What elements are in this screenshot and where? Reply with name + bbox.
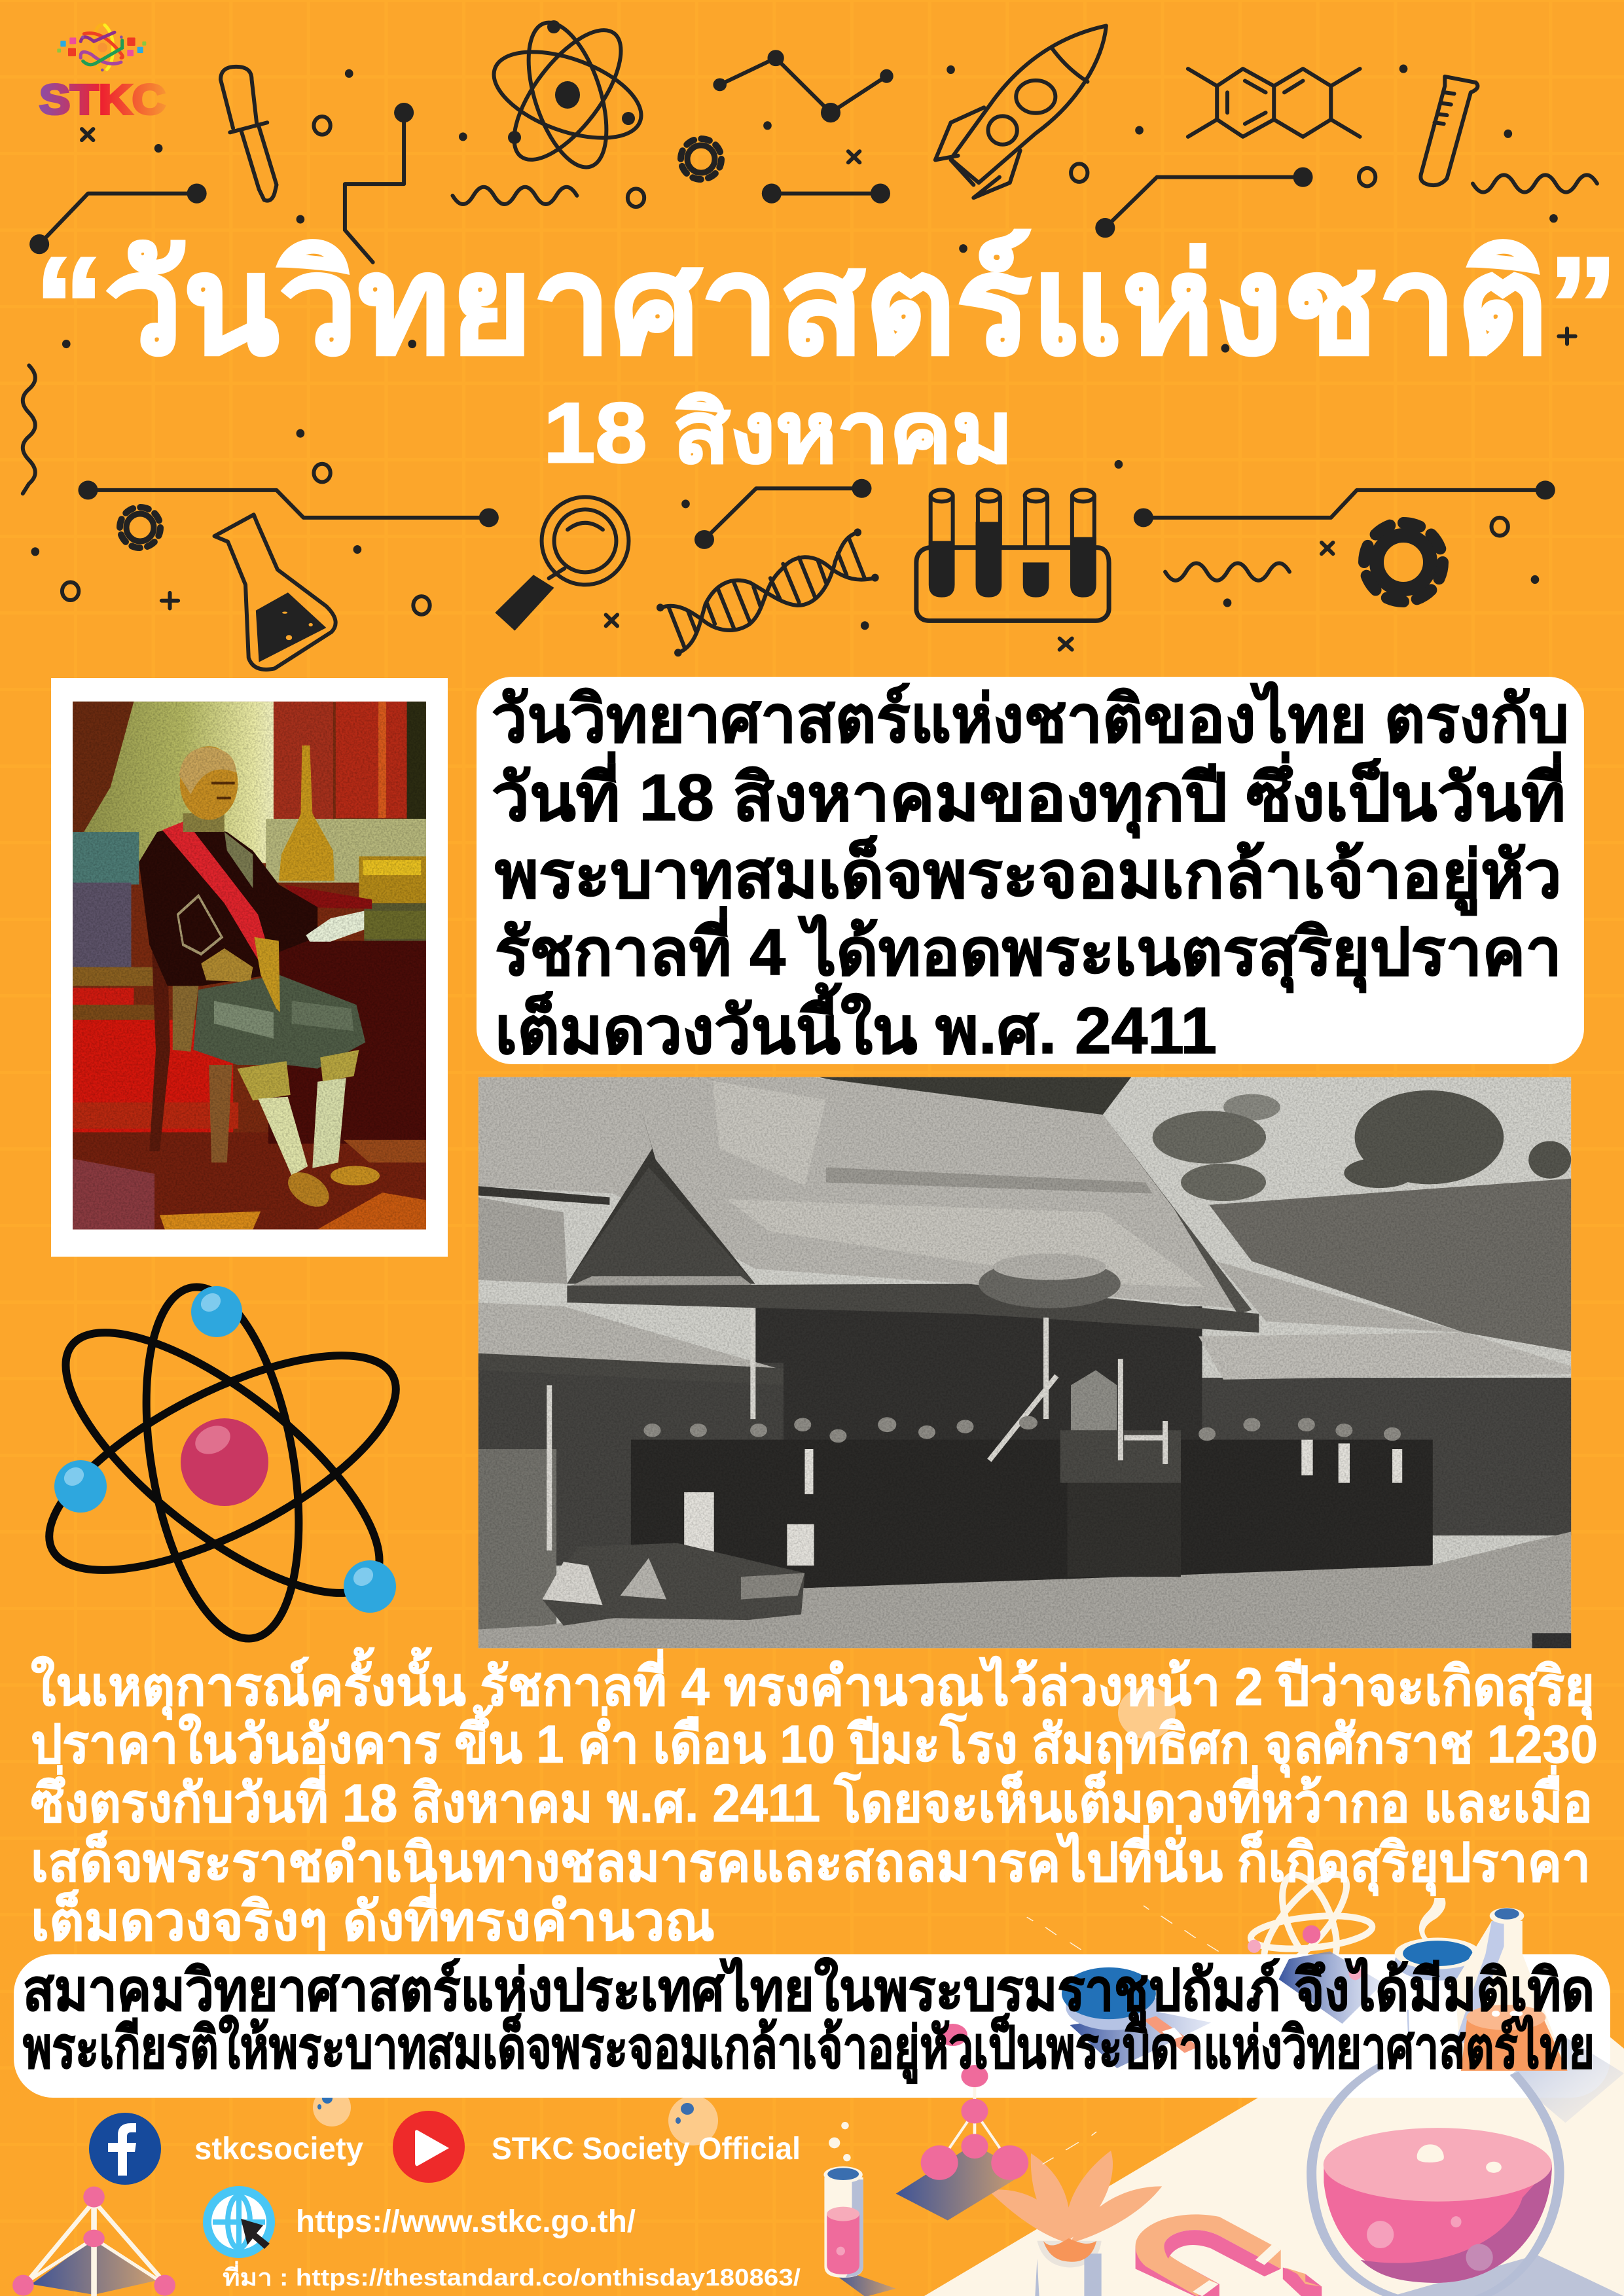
icon: test tube rack	[916, 490, 1109, 620]
science line icons, lower band	[78, 479, 1555, 670]
source credit: ที่มา : https://thestandard.co/onthisday180863/	[223, 2261, 801, 2291]
test tube	[823, 2166, 896, 2296]
lab atom	[1247, 1869, 1377, 1973]
intro text panel: เต็มดวงวันนี้ใน พ.ศ. 2411	[495, 982, 1217, 1067]
icon: magnifier	[495, 497, 628, 631]
lab scene: test tube and pyramid molecule	[12, 2122, 896, 2296]
portrait frame	[51, 678, 448, 1257]
banner text	[23, 1957, 1595, 2084]
icon: DNA helix	[657, 500, 879, 656]
table surface in lab scene	[924, 1950, 1624, 2296]
icon: globe with cursor	[203, 2186, 275, 2258]
icon: youtube	[393, 2111, 465, 2183]
icon: big gear	[1364, 523, 1443, 601]
icon: dropper	[221, 67, 276, 201]
icon: small gear	[681, 139, 721, 179]
icon: facebook	[89, 2113, 161, 2185]
painting brush texture	[73, 702, 425, 1229]
body paragraph: เสด็จพระราชดำเนินทางชลมารคและสถลมารคไปที่นั่น ก็เกิดสุริยุปราคา	[31, 1825, 1591, 1896]
logo wordmark: STKC	[39, 76, 166, 123]
connector lines lower	[78, 479, 1555, 549]
icons: waves, rings and marks	[23, 65, 1597, 650]
big round flask with pink liquid	[1312, 2066, 1624, 2296]
icon: small gear lower	[120, 507, 160, 548]
pale bubble behind text	[1118, 1687, 1176, 1739]
intro text panel: พระบาทสมเด็จพระจอมเกล้าเจ้าอยู่หัว	[495, 835, 1562, 916]
intro text panel: รัชกาลที่ 4 ได้ทอดพระเนตรสุริยุปราคา	[495, 906, 1562, 993]
bubbles	[313, 2089, 718, 2145]
cream dots	[829, 2122, 851, 2161]
bottle with orange liquid	[1408, 1908, 1624, 2123]
body paragraph	[31, 1647, 1598, 1952]
body paragraph: เต็มดวงจริงๆ ดังที่ทรงคำนวณ	[31, 1884, 715, 1952]
blue cup on banner	[1279, 1951, 1383, 2024]
intro text panel: วันที่ 18 สิงหาคมของทุกปี ซึ่งเป็นวันที่	[492, 751, 1566, 838]
website link: https://www.stkc.go.th/	[296, 2204, 636, 2239]
facebook handle: stkcsociety	[194, 2132, 363, 2166]
intro text panel: วันวิทยาศาสตร์แห่งชาติของไทย ตรงกับ	[492, 682, 1569, 756]
pyramid molecule	[12, 2187, 175, 2296]
potted plant	[988, 2151, 1162, 2296]
pink marker on cup	[1349, 1966, 1362, 1980]
lab scene: glassware	[988, 1898, 1624, 2296]
atom illustration	[20, 1275, 425, 1651]
portrait painting	[73, 702, 426, 1229]
icon: atom	[482, 13, 653, 177]
title: “วันวิทยาศาสตร์แห่งชาติ”	[34, 228, 1618, 382]
blue steaming dish	[1395, 1898, 1481, 1981]
lab scene: pink molecule	[896, 2024, 1028, 2221]
blue dish on banner	[1062, 1967, 1211, 2068]
photo film grain	[478, 1077, 1571, 1648]
white banner panel	[14, 1954, 1610, 2098]
U magnet	[1136, 2214, 1322, 2296]
historic photograph	[478, 1077, 1571, 1648]
connector lines top	[29, 50, 1313, 262]
logo: STKC	[57, 25, 146, 71]
intro text panel	[477, 677, 1584, 1067]
icon: molecule	[1188, 69, 1360, 137]
science line icons, top band	[23, 13, 1597, 650]
icon: rocket	[935, 26, 1106, 198]
icon: flask	[215, 514, 336, 670]
subtitle date: 18 สิงหาคม	[543, 385, 1013, 480]
icon: test tube	[1420, 77, 1477, 185]
youtube handle: STKC Society Official	[492, 2132, 801, 2166]
dashes	[1027, 1906, 1219, 2164]
